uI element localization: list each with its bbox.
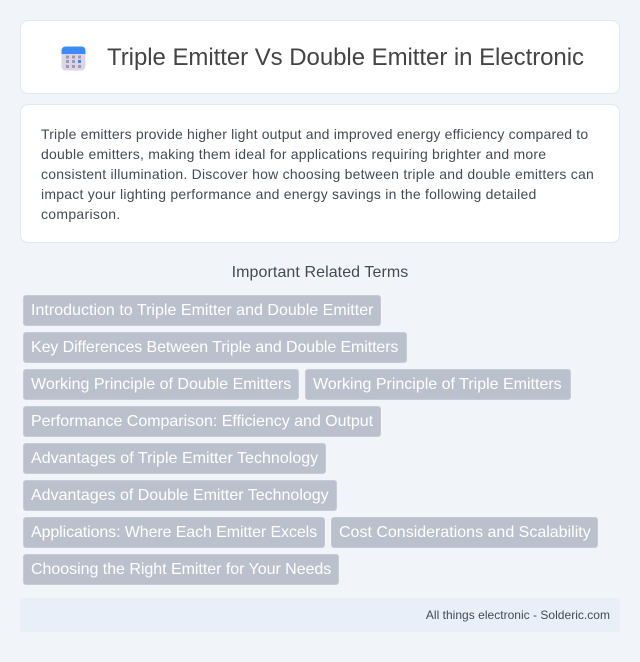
tag: Performance Comparison: Efficiency and Output xyxy=(31,413,373,430)
tag xyxy=(23,369,299,400)
tag xyxy=(23,295,381,326)
tag: Working Principle of Triple Emitters xyxy=(313,376,562,393)
text block: intro: double emitters, making them ideal for applications requiring brighter and more xyxy=(41,146,546,162)
tag: Working Principle of Double Emitters xyxy=(31,376,291,393)
tag list xyxy=(23,295,598,585)
text block: intro: impact your lighting performance and energy savings in the following detailed xyxy=(41,186,537,202)
tag: Cost Considerations and Scalability xyxy=(339,524,591,541)
tag: Advantages of Triple Emitter Technology xyxy=(31,450,318,467)
tag: Choosing the Right Emitter for Your Needs xyxy=(31,561,331,578)
tag: Introduction to Triple Emitter and Double Emitter xyxy=(31,302,373,319)
text block: intro: Triple emitters provide higher light output and improved energy efficiency compared to xyxy=(41,126,588,142)
text block: intro: comparison. xyxy=(41,206,121,222)
tag xyxy=(23,554,339,585)
footer: All things electronic - Solderic.com xyxy=(426,608,610,622)
panel: intro text xyxy=(20,104,620,243)
tag xyxy=(331,517,598,548)
tag: Advantages of Double Emitter Technology xyxy=(31,487,329,504)
tag xyxy=(23,480,337,511)
title: Triple Emitter Vs Double Emitter in Electronic xyxy=(107,44,584,71)
tag xyxy=(23,443,326,474)
footer xyxy=(20,598,620,632)
tag xyxy=(305,369,571,400)
panel: header xyxy=(20,20,620,94)
tag xyxy=(23,517,325,548)
text block: intro xyxy=(41,126,594,222)
icon: calendar xyxy=(62,46,86,70)
tag xyxy=(23,332,407,363)
text block: intro: consistent illumination. Discover how choosing between triple and double emitters can xyxy=(41,166,594,182)
tag: Key Differences Between Triple and Double Emitters xyxy=(31,339,398,356)
tag xyxy=(23,406,381,437)
heading: related terms: Important Related Terms xyxy=(232,264,408,281)
tag: Applications: Where Each Emitter Excels xyxy=(31,524,317,541)
